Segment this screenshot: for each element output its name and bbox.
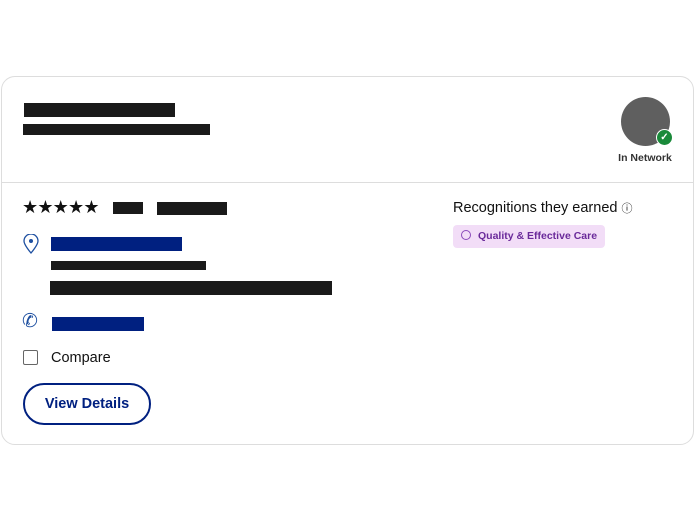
badge: quality & effective care — [453, 225, 605, 248]
recognitions heading: Recognitions they earned ⓘ — [453, 200, 632, 216]
badge: quality & effective care: Quality & Effective Care — [478, 230, 597, 242]
panel: provider card — [1, 76, 694, 445]
icon: location pin — [23, 234, 39, 254]
button: view details: View Details — [45, 396, 129, 412]
icon: phone: ✆ — [22, 311, 38, 332]
icon: check badge — [656, 129, 673, 146]
avatar with in network badge — [618, 97, 672, 164]
header name redacted — [24, 103, 175, 117]
label: in network: In Network — [618, 152, 672, 164]
header subtitle redacted — [23, 124, 210, 135]
rating stars: ★★★★★ — [22, 197, 99, 217]
address redacted — [51, 237, 182, 251]
divider — [2, 182, 693, 183]
button: view details — [23, 383, 151, 425]
panel: provider card: Compare — [51, 350, 111, 366]
phone redacted — [52, 317, 144, 331]
icon: check badge: ✓ — [660, 132, 669, 143]
compare checkbox — [23, 350, 38, 365]
